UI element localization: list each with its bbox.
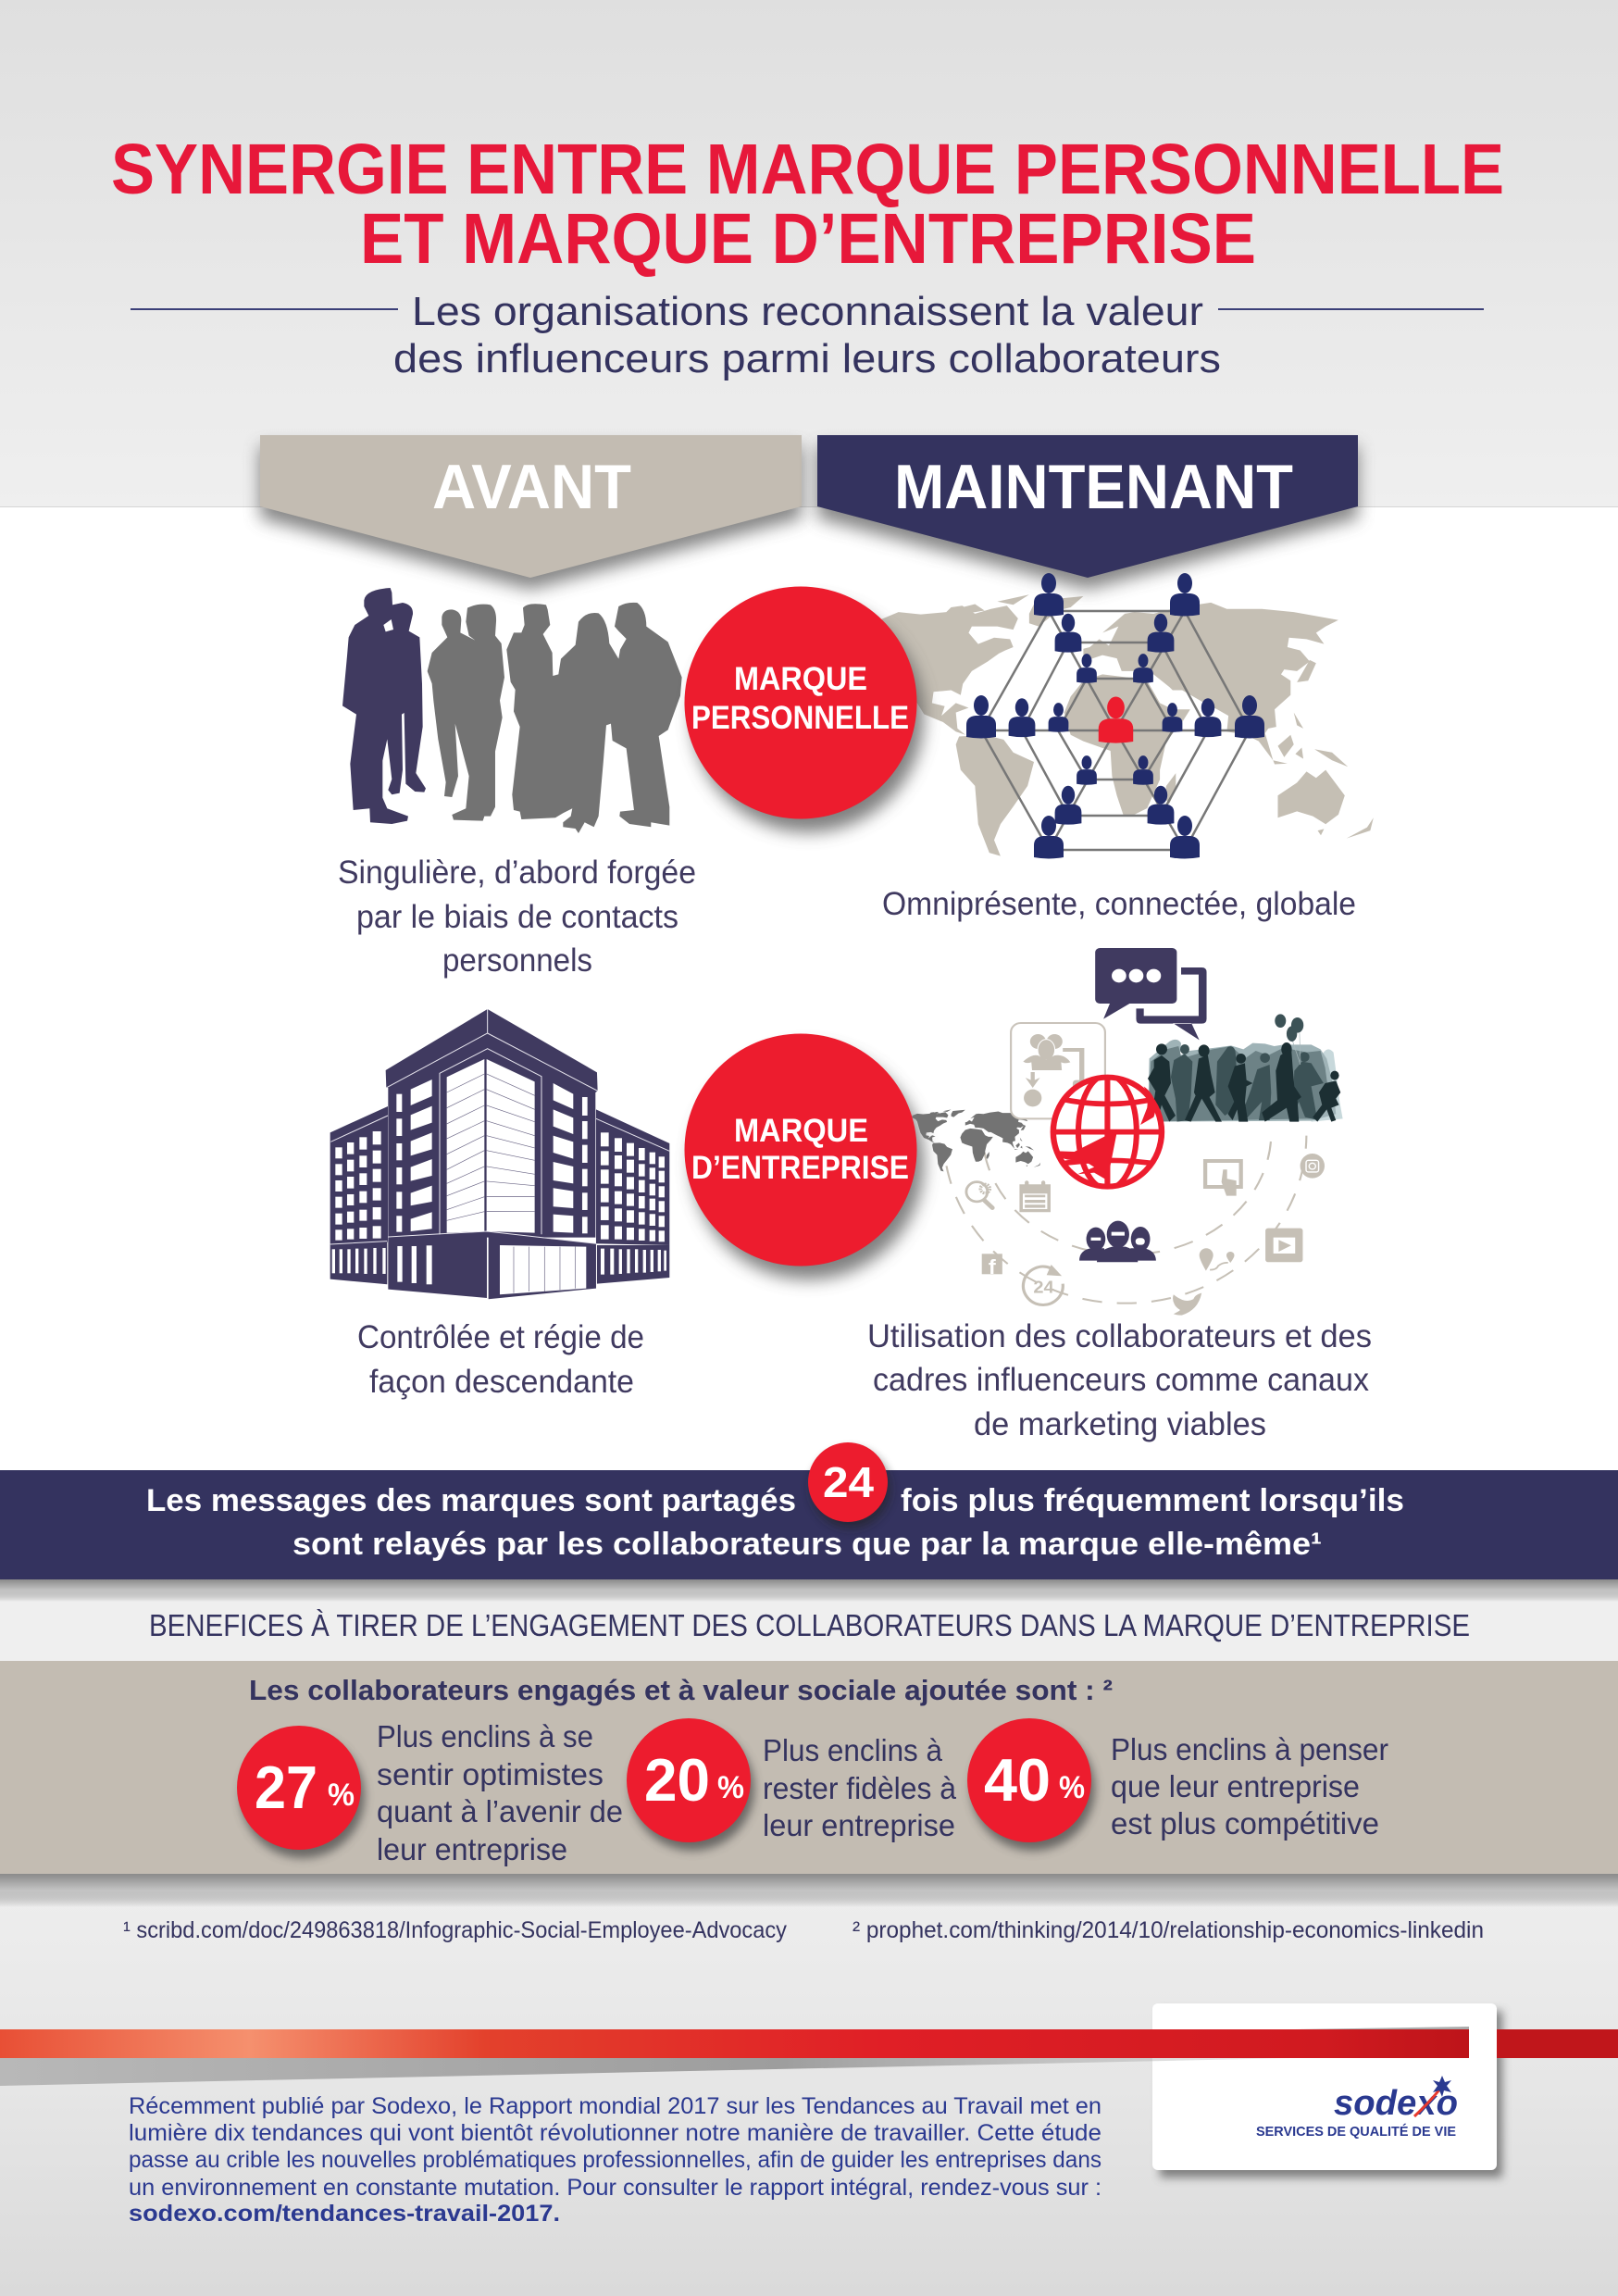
stat: 20%: % xyxy=(717,1770,744,1805)
circle: marque personnelle: PERSONNELLE xyxy=(691,700,909,736)
text: utilisation: Utilisation des collaborateurs et des xyxy=(867,1318,1372,1354)
panel heading: Les collaborateurs engagés et à valeur sociale ajoutée sont : ² xyxy=(249,1674,1113,1706)
text: utilisation: de marketing viables xyxy=(974,1406,1266,1442)
stat: 20%: Plus enclins à xyxy=(763,1733,943,1767)
red ribbon xyxy=(0,2027,1618,2086)
stat: 40% xyxy=(967,1718,1388,1851)
stat: 20%: 20 xyxy=(644,1746,710,1814)
circle: marque d'entreprise: D’ENTREPRISE xyxy=(691,1150,909,1186)
text: contrôlée xyxy=(357,1319,644,1400)
text: report description: sodexo.com/tendances-travail-2017. xyxy=(129,2201,560,2227)
text: singulière xyxy=(338,855,696,979)
logo: sodexo xyxy=(1256,2076,1458,2140)
band: shared messages statistic: Les messages des marques sont partagés xyxy=(146,1483,796,1518)
banner: maintenant xyxy=(817,435,1358,590)
icon: calendar xyxy=(1019,1180,1051,1212)
text: contrôlée: façon descendante xyxy=(369,1364,634,1400)
stat: 27%: 27 xyxy=(255,1753,317,1821)
icon: facebook: f xyxy=(989,1255,996,1279)
logo card xyxy=(1152,2003,1502,2177)
stat: 27% xyxy=(237,1719,623,1866)
stat: 40%: que leur entreprise xyxy=(1111,1769,1360,1803)
icon: network people xyxy=(966,573,1264,859)
badge: 24 xyxy=(808,1442,890,1529)
band: shared messages statistic xyxy=(0,1442,1618,1602)
icon: world map with connected network xyxy=(879,594,1374,856)
stat: 27%: sentir optimistes xyxy=(377,1757,604,1791)
stat: 40%: Plus enclins à penser xyxy=(1111,1732,1388,1766)
icon: crowd silhouette xyxy=(1148,1014,1343,1122)
band: shared messages statistic: fois plus fréquemment lorsqu’ils xyxy=(901,1483,1404,1518)
text: singulière: personnels xyxy=(442,942,592,979)
title: SYNERGIE ENTRE MARQUE PERSONNELLE xyxy=(111,130,1504,209)
subtitle: Les organisations reconnaissent la valeur xyxy=(412,289,1203,334)
icon: instagram xyxy=(1301,1154,1325,1179)
text: report description: lumière dix tendances qui vont bientôt révolutionner notre manière de travailler. Cette étude xyxy=(129,2120,1101,2146)
icon: facebook xyxy=(982,1254,1002,1279)
icon: small world map xyxy=(913,1109,1040,1171)
stat: 27%: Plus enclins à se xyxy=(377,1719,593,1753)
text: report description xyxy=(129,2093,1101,2227)
text: report description: Récemment publié par Sodexo, le Rapport mondial 2017 sur les Tendances au Travail met en xyxy=(129,2093,1101,2119)
text: report description: un environnement en constante mutation. Pour consulter le rapport intégral, rendez-vous sur : xyxy=(129,2175,1101,2201)
circle: marque personnelle: MARQUE xyxy=(734,661,867,697)
subtitle: des influenceurs parmi leurs collaborateurs xyxy=(393,336,1221,381)
icon: speech bubbles xyxy=(1095,948,1207,1040)
icon: group of people silhouettes xyxy=(342,588,682,833)
banner: avant: AVANT xyxy=(432,452,631,522)
icon: twitter bird xyxy=(1173,1293,1201,1316)
stat: 40%: 40 xyxy=(984,1746,1051,1814)
text: singulière: Singulière, d’abord forgée xyxy=(338,855,696,891)
badge: 24: 24 xyxy=(823,1458,874,1506)
icon: team with headsets xyxy=(1079,1221,1156,1262)
icon: dashed arcs xyxy=(946,1136,1306,1304)
icon: office building xyxy=(330,1009,669,1299)
circle: marque personnelle xyxy=(685,587,924,832)
title xyxy=(111,130,1504,279)
circle: marque d'entreprise: MARQUE xyxy=(734,1113,868,1149)
icon: 24 hour clock xyxy=(1023,1265,1063,1304)
icon: search gear xyxy=(966,1182,992,1208)
stat: 20%: leur entreprise xyxy=(763,1808,955,1842)
band: shared messages statistic: sont relayés par les collaborateurs que par la marque elle-même¹ xyxy=(292,1527,1322,1562)
icon: social media composite xyxy=(913,948,1343,1316)
stat: 20%: rester fidèles à xyxy=(763,1771,957,1805)
icon: tablet touch xyxy=(1203,1159,1243,1196)
banner: maintenant: MAINTENANT xyxy=(894,452,1293,522)
panel: engaged employees xyxy=(0,1661,1618,1907)
text: singulière: par le biais de contacts xyxy=(356,899,678,935)
logo: sodexo: SERVICES DE QUALITÉ DE VIE xyxy=(1256,2124,1456,2140)
stat: 27%: leur entreprise xyxy=(377,1832,567,1866)
footnotes: ¹ scribd.com/doc/249863818/Infographic-Social-Employee-Advocacy xyxy=(123,1917,787,1943)
footnotes: ² prophet.com/thinking/2014/10/relationship-economics-linkedin xyxy=(853,1917,1484,1943)
stat: 27%: % xyxy=(328,1778,355,1813)
banner: avant xyxy=(260,435,802,590)
logo: sodexo: sodexo xyxy=(1334,2084,1458,2123)
icon: location route xyxy=(1200,1248,1235,1271)
stat: 40%: est plus compétitive xyxy=(1111,1806,1379,1841)
title: ET MARQUE D’ENTREPRISE xyxy=(360,199,1256,279)
text: utilisation: cadres influenceurs comme canaux xyxy=(873,1362,1369,1398)
text: utilisation xyxy=(867,1318,1372,1442)
stat: 40%: % xyxy=(1059,1770,1085,1805)
circle: marque d'entreprise xyxy=(685,1033,924,1279)
icon: people square xyxy=(1011,1023,1105,1118)
icon: red globe xyxy=(1045,1074,1170,1190)
text: report description: passe au crible les nouvelles problématiques professionnelles, afin de guider les entreprises dans xyxy=(129,2147,1101,2173)
heading: benefits: BENEFICES À TIRER DE L’ENGAGEMENT DES COLLABORATEURS DANS LA MARQUE D’ENTREPRISE xyxy=(149,1608,1470,1642)
icon: film xyxy=(1265,1229,1302,1262)
stat: 27%: quant à l’avenir de xyxy=(377,1794,623,1828)
text: omniprésente: Omniprésente, connectée, globale xyxy=(882,886,1356,922)
footnotes xyxy=(123,1917,1484,1943)
subtitle xyxy=(131,289,1484,381)
icon: 24 hour clock: 24 xyxy=(1033,1278,1054,1297)
text: contrôlée: Contrôlée et régie de xyxy=(357,1319,644,1355)
stat: 20% xyxy=(627,1718,957,1851)
